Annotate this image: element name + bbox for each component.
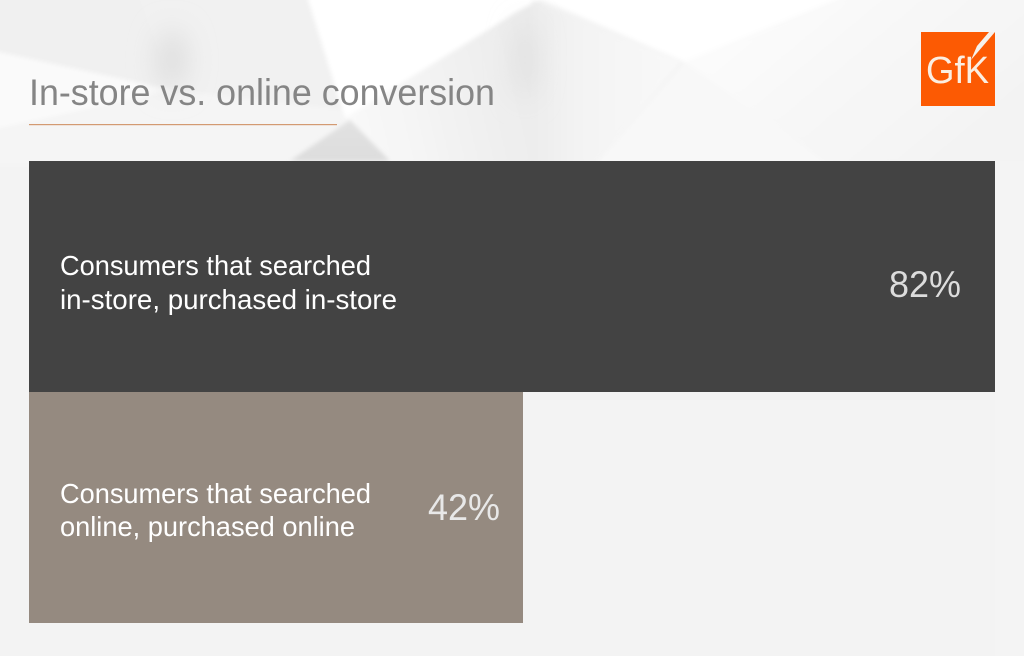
panel: in-store bar <box>29 161 995 392</box>
icon: GfK logo: GfK <box>926 50 989 92</box>
icon: GfK logo <box>921 32 995 106</box>
online value: 42% <box>428 487 500 528</box>
title: In-store vs. online conversion <box>29 72 495 113</box>
in-store label: in-store, purchased in-store <box>60 284 397 315</box>
in-store label: Consumers that searched <box>60 250 371 281</box>
panel: online bar <box>29 392 523 623</box>
online label: Consumers that searched <box>60 478 371 509</box>
online label: online, purchased online <box>60 511 355 542</box>
in-store value: 82% <box>889 264 961 305</box>
soft creases <box>158 20 534 100</box>
title underline <box>29 124 337 125</box>
